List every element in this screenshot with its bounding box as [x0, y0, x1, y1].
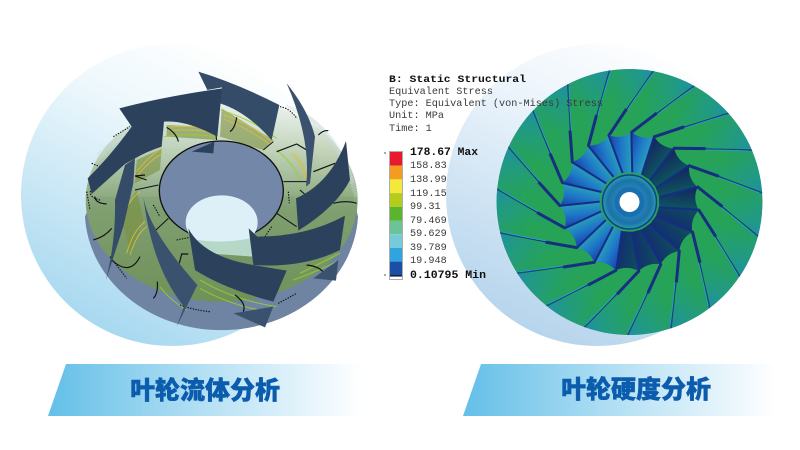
yellow flow streaks	[123, 115, 307, 255]
scale values: 79.469	[410, 216, 447, 227]
lower rim green over opening	[193, 238, 253, 257]
flow field green area	[86, 98, 358, 302]
banner: impeller flow analysis	[48, 364, 362, 416]
blade right	[296, 141, 350, 231]
blade root right	[313, 260, 338, 281]
blades	[88, 72, 350, 327]
hub ring	[614, 187, 644, 217]
panel: impeller hardness analysis	[446, 44, 767, 346]
blade stub on hub	[192, 142, 214, 153]
central opening	[186, 195, 258, 249]
legend header: Unit: MPa	[389, 110, 444, 122]
stress contour wheel	[492, 65, 767, 340]
banner title left: 叶轮流体分析	[130, 377, 280, 405]
streamline dotted curves	[87, 107, 357, 312]
banner title right: 叶轮硬度分析	[561, 375, 711, 404]
legend header: Equivalent Stress	[389, 86, 493, 98]
blade lower right	[249, 216, 345, 266]
colour scale	[384, 152, 402, 280]
banner: impeller hardness analysis	[463, 364, 776, 416]
rim shading	[496, 69, 762, 335]
legend header: B: Static Structural	[389, 74, 526, 86]
background circle right	[446, 44, 748, 346]
blade left	[106, 158, 135, 280]
legend header: Type: Equivalent (von-Mises) Stress	[389, 98, 603, 110]
pale upper streaks	[95, 107, 357, 197]
scale values	[410, 147, 486, 282]
vanes	[492, 65, 767, 340]
scale values: 39.789	[410, 243, 447, 254]
blade root bottom	[233, 307, 273, 327]
background circle left	[21, 44, 323, 346]
scale values: 178.67 Max	[410, 147, 478, 159]
blade thin upper right	[287, 83, 315, 187]
scale values: 0.10795 Min	[410, 270, 486, 282]
scale values: 19.948	[410, 256, 447, 267]
stress legend	[384, 74, 603, 282]
scale values: 99.31	[410, 202, 441, 213]
panel: impeller flow analysis	[21, 44, 358, 346]
wheel base	[496, 69, 762, 335]
blade lower left	[143, 197, 197, 327]
dark olive shading near blades	[122, 108, 273, 253]
scale values: 59.629	[410, 229, 447, 240]
hub bore	[620, 192, 640, 212]
impeller disc	[85, 197, 358, 330]
blade upper left	[88, 88, 222, 194]
scale values: 119.15	[410, 189, 447, 200]
scale values: 158.83	[410, 161, 447, 172]
impeller flow model	[85, 72, 358, 330]
blade bottom	[188, 228, 287, 302]
blade top	[198, 72, 279, 140]
legend header	[389, 74, 603, 135]
legend header: Time: 1	[389, 123, 432, 135]
scale values: 138.99	[410, 175, 447, 186]
hub face	[159, 141, 283, 240]
wheel hub	[602, 175, 656, 229]
